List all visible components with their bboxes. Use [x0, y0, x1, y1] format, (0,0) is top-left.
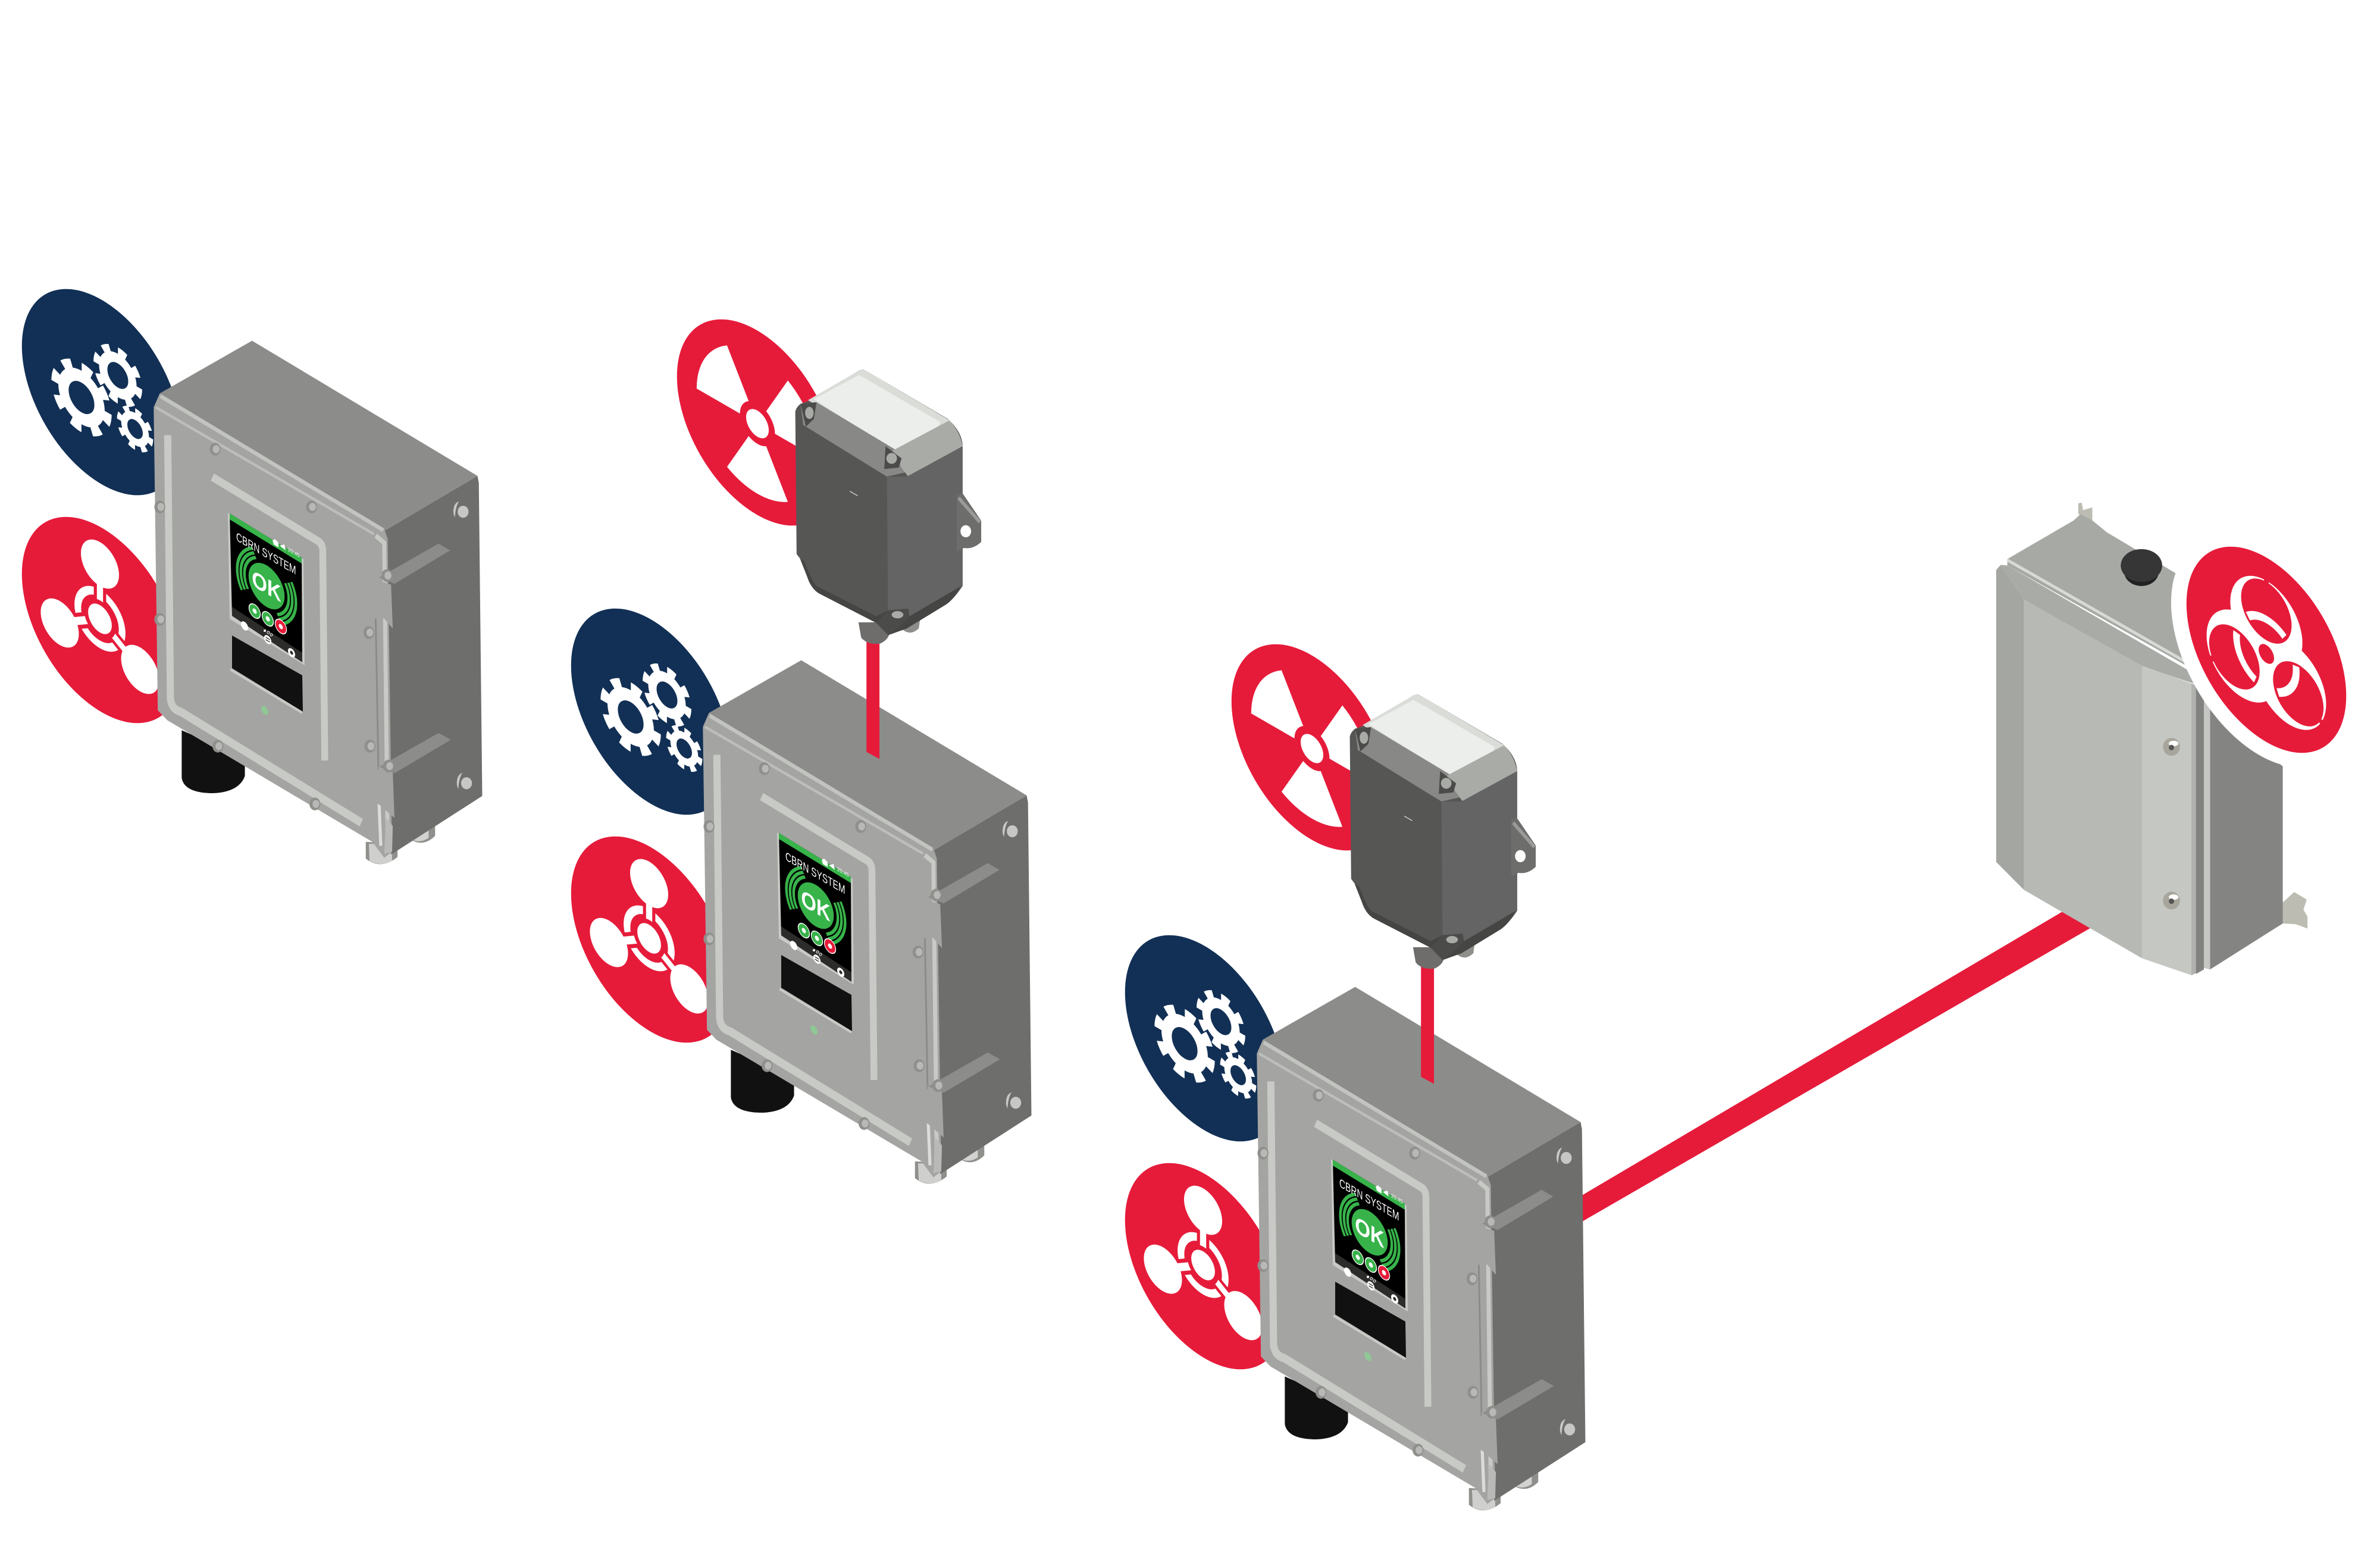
monitor enclosure with display	[703, 660, 1031, 1183]
display text: CBRN SYSTEM	[1339, 1176, 1399, 1224]
enclosure door main	[2024, 600, 2142, 958]
remote biological enclosure	[1996, 503, 2307, 975]
enclosure door edge	[2142, 666, 2196, 975]
unit 1: standalone monitor	[22, 253, 482, 864]
display text	[236, 530, 299, 608]
door screw, upper	[2163, 738, 2180, 756]
radiation sensor with red link, unit 3	[1350, 694, 1536, 1084]
enclosure top	[2008, 514, 2189, 667]
icon: gears on navy disc	[1125, 900, 1285, 1177]
display text: CBRN SYSTEM	[236, 530, 296, 578]
enclosure door left bevel	[1996, 565, 2024, 890]
unit 2: monitor with radiation sensor	[571, 574, 1031, 1183]
icon: gears on navy disc	[22, 253, 181, 531]
icon: chemical hazard on red disc	[22, 482, 181, 758]
link: monitor to remote enclosure	[1571, 907, 2100, 1228]
icon: chemical hazard on red disc	[571, 801, 731, 1078]
unit 3: monitor with radiation sensor and biological enclosure	[1125, 900, 1585, 1510]
monitor enclosure with display	[1257, 987, 1585, 1510]
mounting bracket, bottom	[2282, 892, 2307, 929]
door screw, lower	[2163, 892, 2180, 909]
vent cap	[2121, 549, 2162, 586]
icon: radiation disc, unit 2	[677, 284, 837, 561]
display text	[785, 850, 848, 928]
display text: OK	[1355, 1212, 1385, 1254]
display text: OK	[801, 885, 831, 928]
enclosure lid lip	[2000, 565, 2196, 684]
mounting bracket, top	[2078, 503, 2093, 521]
radiation sensor with red link, unit 2	[796, 370, 981, 759]
icon: radiation disc, unit 3	[1232, 609, 1391, 885]
monitor enclosure with display	[154, 341, 482, 864]
display text: 20:45	[1391, 1192, 1402, 1205]
enclosure side	[2210, 708, 2283, 969]
display text: 20:45	[288, 546, 299, 559]
display text: 20:45	[837, 866, 848, 878]
icon: biohazard disc with white halo	[2171, 501, 2347, 806]
display text: OK	[252, 566, 281, 608]
icon: gears on navy disc	[571, 574, 731, 850]
icon: chemical hazard on red disc	[1125, 1128, 1285, 1404]
display text: CBRN SYSTEM	[785, 850, 845, 897]
display text	[1339, 1176, 1402, 1254]
